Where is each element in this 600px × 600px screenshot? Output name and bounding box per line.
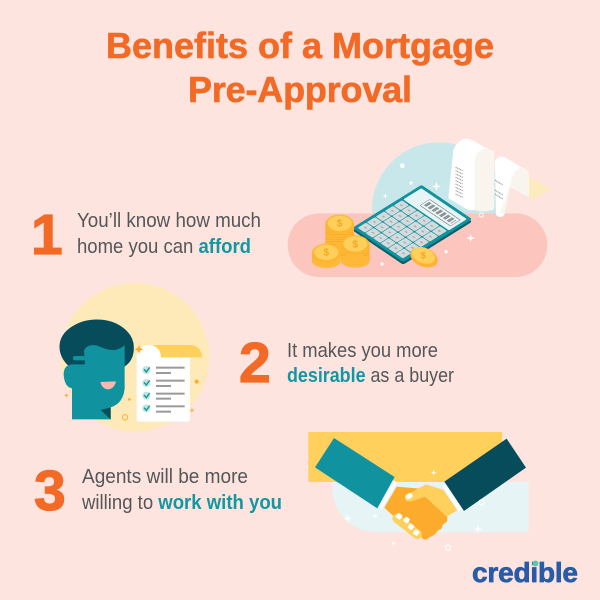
logo: credible: credible <box>472 557 578 588</box>
keys <box>358 223 373 233</box>
text: benefit 2 <box>287 340 454 387</box>
pale blue shape <box>332 482 529 532</box>
illustration: person with checklist <box>60 283 209 432</box>
text: benefit 2: desirable as a buyer <box>287 365 454 387</box>
calculator body <box>352 185 472 265</box>
background circle <box>372 142 506 276</box>
number 3: 3 <box>34 459 66 523</box>
text: benefit 3: Agents will be more <box>82 466 248 488</box>
coin stacks: $ <box>324 248 330 259</box>
coin stacks: $ <box>337 219 343 230</box>
number 2: 2 <box>239 331 271 395</box>
coin stacks: $ <box>353 239 359 250</box>
coin stacks: $ <box>421 251 427 261</box>
dark sleeve <box>444 439 526 511</box>
receipt <box>448 139 552 217</box>
hair <box>60 320 133 366</box>
text: benefit 1: home you can afford <box>77 236 251 258</box>
text: benefit 2: It makes you more <box>287 340 438 362</box>
illustration: calculator and coins <box>288 139 552 277</box>
screen <box>403 188 467 230</box>
text: benefit 3 <box>81 466 282 514</box>
collar shadow <box>101 407 111 419</box>
yellow circle <box>61 283 209 432</box>
teal sleeve <box>315 438 395 508</box>
pink pill <box>288 213 547 277</box>
illustration: handshake <box>308 432 529 550</box>
title: Benefits of a Mortgage <box>106 25 494 66</box>
yellow rectangle <box>308 432 502 482</box>
number 1: 1 <box>31 203 63 267</box>
coin stacks <box>312 215 441 271</box>
text: benefit 1: You’ll know how much <box>77 210 261 232</box>
text: benefit 3: willing to work with you <box>81 492 282 514</box>
brow <box>73 356 85 360</box>
sparkles <box>344 470 484 550</box>
checks <box>142 366 150 412</box>
hands <box>384 484 457 540</box>
sparkles <box>64 345 199 420</box>
text: benefit 1 <box>77 210 261 258</box>
title <box>106 25 494 110</box>
checklist <box>137 345 202 422</box>
smile <box>100 381 116 389</box>
face <box>64 345 125 419</box>
title: Pre-Approval <box>188 69 412 110</box>
sparkles <box>380 163 483 266</box>
cuffs <box>377 480 397 509</box>
